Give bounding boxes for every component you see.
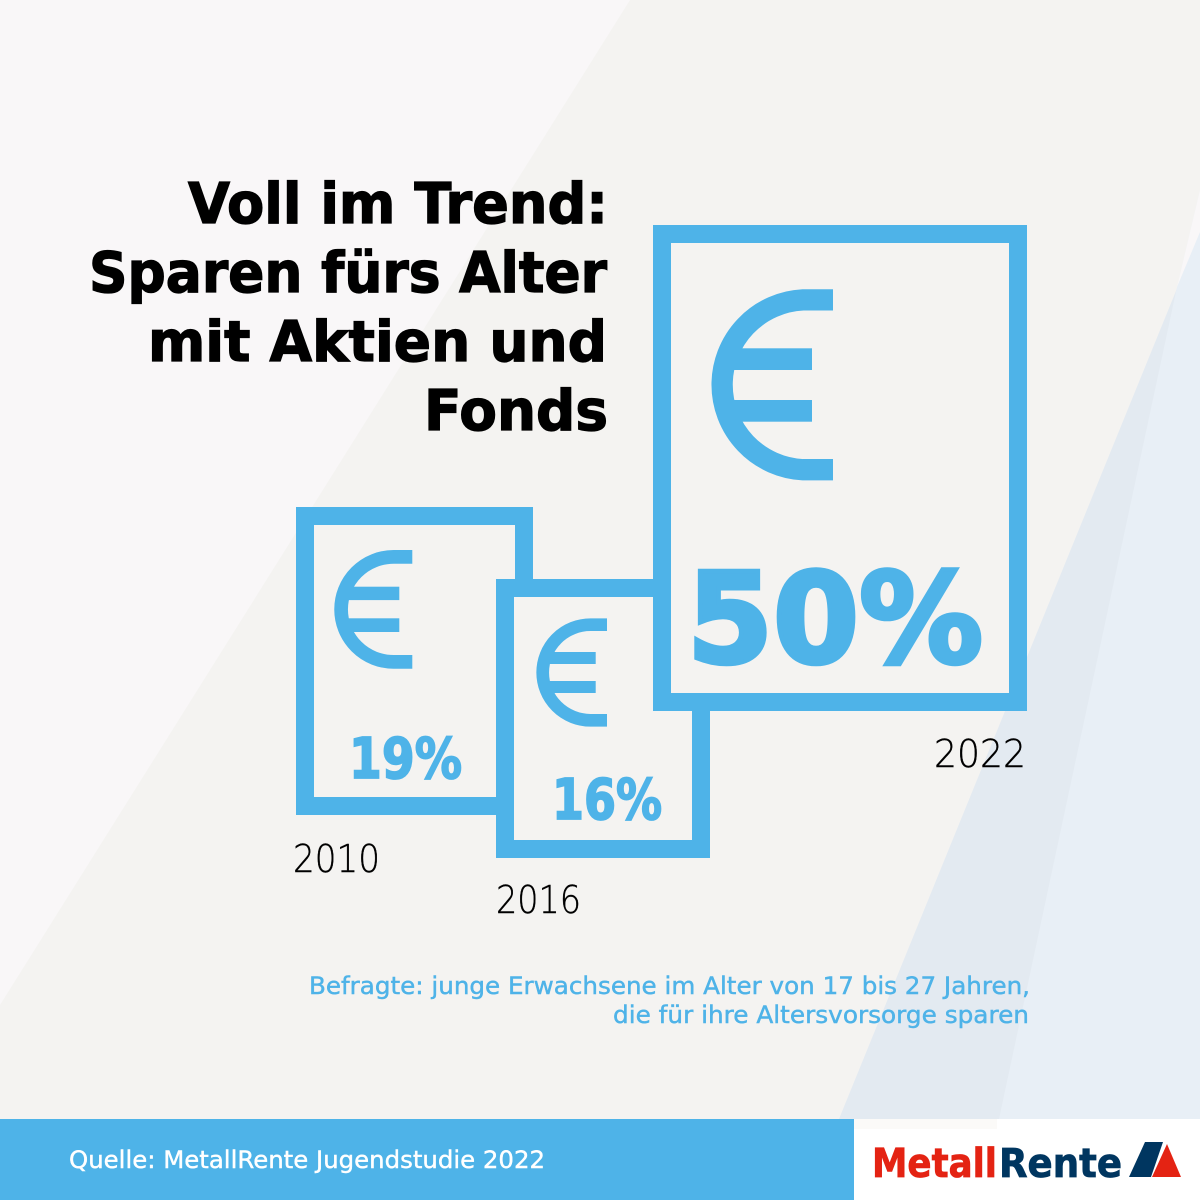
title: Sparen fürs Alter (89, 241, 607, 306)
title (89, 172, 608, 444)
panel: 2010 banknote (305, 516, 524, 806)
frame: 2016 (505, 588, 701, 849)
label: 2022: 2022 (934, 732, 1026, 776)
note: respondents: Befragte: junge Erwachsene im Alter von 17 bis 27 Jahren, (309, 972, 1030, 1000)
label: 2010: 2010 (293, 837, 380, 881)
icon: euro 2016 (543, 625, 607, 720)
wordmark (872, 1141, 1122, 1187)
logo: MetallRente (854, 1119, 1200, 1200)
label: 2016: 2016 (496, 878, 581, 922)
title: mit Aktien und (148, 310, 607, 375)
frame: 2010 (305, 516, 524, 806)
footer bar (0, 1119, 854, 1200)
note: respondents: die für ihre Altersvorsorge sparen (613, 1001, 1029, 1029)
source line: Quelle: MetallRente Jugendstudie 2022 (69, 1146, 545, 1174)
title: Fonds (424, 379, 608, 444)
icon: euro 2010 (341, 557, 412, 662)
wordmark: Metall (872, 1141, 997, 1187)
wordmark: Rente (999, 1141, 1122, 1187)
frame: 2022 (662, 234, 1018, 702)
title: Voll im Trend: (188, 172, 608, 237)
value: 50%: 50% (687, 547, 983, 692)
logo mark (1129, 1142, 1181, 1177)
value: 16%: 16% (552, 768, 662, 833)
panel: 2022 banknote (662, 234, 1018, 702)
note: respondents (309, 972, 1030, 1029)
value: 19%: 19% (349, 727, 462, 792)
icon: euro 2022 (722, 300, 833, 470)
panel: 2016 banknote (505, 588, 701, 849)
